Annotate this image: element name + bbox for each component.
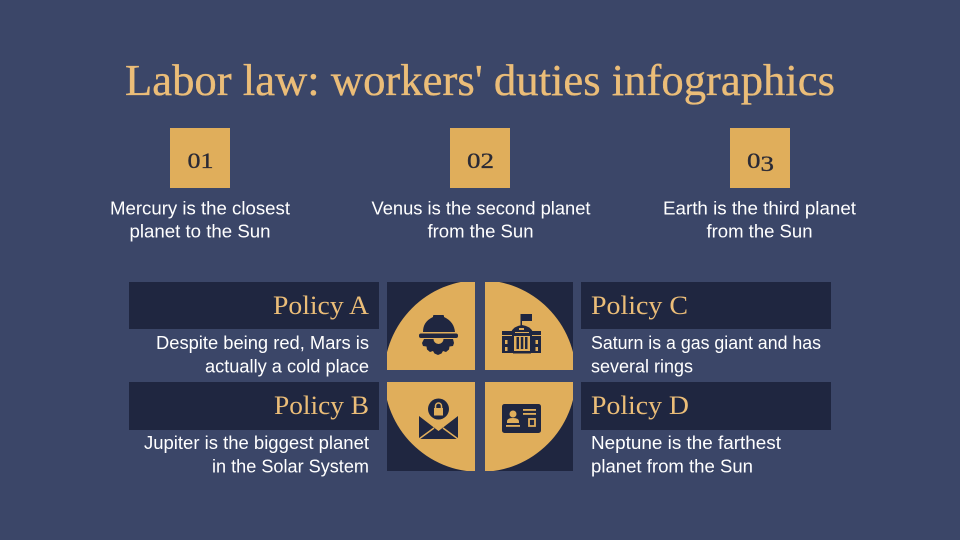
heading bar: Policy C: Policy C — [591, 291, 688, 320]
text: Venus: from the Sun — [428, 222, 534, 242]
text: Jupiter: in the Solar System — [212, 456, 369, 476]
number badge 03: 3 — [760, 151, 774, 176]
number badge 01 — [170, 128, 230, 188]
text: Earth: from the Sun — [706, 222, 812, 242]
step 02 — [372, 128, 590, 242]
text: Mercury: Mercury is the closest — [110, 198, 290, 218]
icon: locked envelope — [419, 398, 458, 439]
panel: Policy C — [581, 282, 831, 376]
icon: government building with flag — [502, 314, 541, 354]
panel: Policy D — [581, 382, 831, 476]
step 03 — [663, 128, 856, 242]
heading bar: Policy B: Policy B — [274, 391, 369, 420]
text: Saturn: Saturn is a gas giant and has — [591, 333, 821, 353]
text: Mercury: planet to the Sun — [130, 222, 270, 242]
text: Neptune — [591, 433, 781, 476]
text: Mars — [156, 333, 369, 376]
heading bar: Policy B — [129, 382, 379, 430]
text: Mercury — [110, 198, 290, 242]
number badge 01: 01 — [188, 148, 214, 173]
number badge 03 — [730, 128, 790, 188]
text: Saturn: several rings — [591, 356, 693, 376]
text: Jupiter: Jupiter is the biggest planet — [144, 433, 369, 453]
panel: Policy A — [129, 282, 379, 376]
title: Labor law: workers' duties infographics — [125, 56, 835, 105]
text: Neptune: Neptune is the farthest — [591, 433, 781, 453]
central quartered circle — [387, 282, 573, 471]
number badge 02: 02 — [467, 148, 494, 173]
number badge 03: 0 — [747, 148, 758, 173]
text: Venus — [372, 198, 590, 242]
heading bar: Policy D — [581, 382, 831, 430]
text: Neptune: planet from the Sun — [591, 456, 753, 476]
heading bar: Policy A: Policy A — [273, 291, 369, 320]
panel: Policy B — [129, 382, 379, 476]
text: Earth: Earth is the third planet — [663, 198, 856, 218]
text: Mars: Despite being red, Mars is — [156, 333, 369, 353]
step 01 — [110, 128, 290, 242]
icon: ID card — [502, 404, 541, 433]
text: Mars: actually a cold place — [205, 356, 369, 376]
heading bar: Policy A — [129, 282, 379, 329]
icon: hard hat and gear — [419, 315, 458, 355]
heading bar: Policy D: Policy D — [591, 391, 689, 420]
heading bar: Policy C — [581, 282, 831, 329]
text: Jupiter — [144, 433, 369, 476]
number badge 02 — [450, 128, 510, 188]
text: Saturn — [591, 333, 821, 376]
text: Earth — [663, 198, 856, 242]
text: Venus: Venus is the second planet — [372, 198, 590, 218]
